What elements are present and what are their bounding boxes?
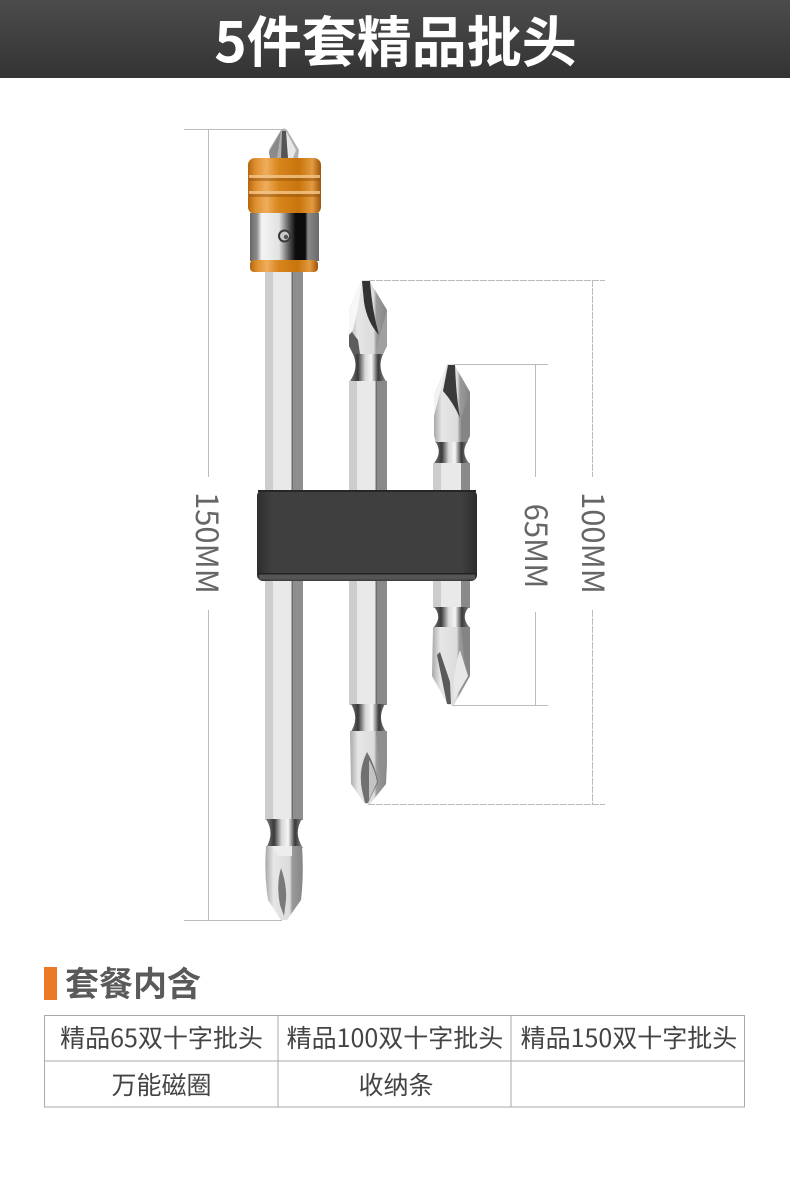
cell: 150 bit: 精品150双十字批头 — [521, 1019, 737, 1055]
upper head — [434, 364, 470, 442]
shaft — [265, 270, 303, 820]
dimension: 150MM: 150MM — [187, 492, 232, 594]
cell: 100 bit: 精品100双十字批头 — [287, 1019, 503, 1055]
lower head — [265, 846, 303, 920]
cell: storage strip: 收纳条 — [358, 1066, 434, 1102]
orange base ring — [250, 260, 318, 272]
shaft — [349, 381, 387, 705]
contents table — [44, 1015, 745, 1107]
lower head — [432, 627, 470, 705]
orange marker — [44, 967, 57, 1000]
chrome sleeve — [250, 213, 319, 261]
black storage bar — [257, 490, 477, 581]
title: 5件套精品批头 — [214, 0, 577, 78]
lower neck — [350, 704, 387, 733]
upper neck — [350, 352, 386, 381]
upper neck — [434, 441, 469, 463]
shaft — [433, 463, 470, 608]
bit: 100mm — [349, 280, 387, 804]
section heading: 套餐内含: 套餐内含 — [65, 957, 201, 1006]
lower neck — [266, 819, 303, 848]
lower head — [350, 731, 387, 804]
upper head — [349, 280, 387, 354]
cell: 65 bit: 精品65双十字批头 — [60, 1019, 263, 1055]
dimension: 65MM: 65MM — [516, 504, 561, 588]
bit: 65mm — [432, 364, 470, 705]
top tip — [269, 128, 299, 158]
dimension: 100MM — [368, 280, 618, 804]
dimension: 100MM: 100MM — [573, 492, 618, 594]
header banner — [0, 0, 790, 78]
bit: 150mm with magnetic collar — [248, 128, 321, 920]
cell: magnet ring: 万能磁圈 — [111, 1066, 212, 1102]
dimension: 65MM — [452, 364, 561, 706]
lower neck — [433, 607, 470, 628]
orange magnet collar — [248, 158, 321, 214]
dimension: 150MM — [184, 129, 284, 920]
